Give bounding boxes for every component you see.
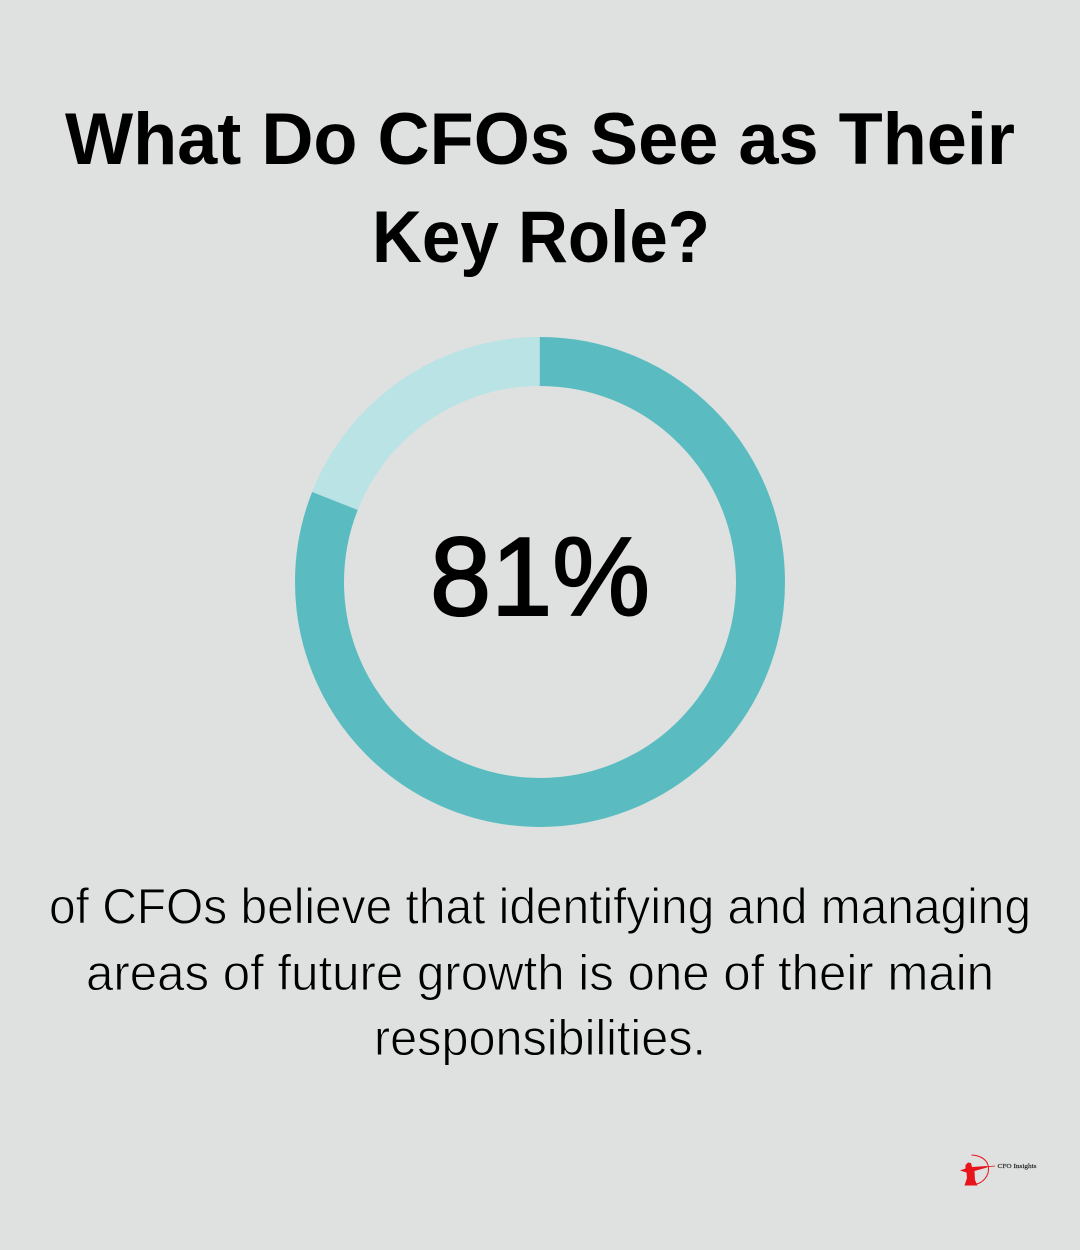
title: Key Role? bbox=[372, 197, 710, 278]
description text bbox=[49, 878, 1031, 1066]
logo: CFO Insights bbox=[960, 1155, 1037, 1186]
description text: of CFOs believe that identifying and managing bbox=[49, 878, 1031, 934]
title bbox=[65, 99, 1015, 278]
donut value: 81% bbox=[430, 515, 650, 639]
title: What Do CFOs See as Their bbox=[65, 99, 1015, 180]
donut chart: 81% bbox=[320, 362, 760, 802]
description text: responsibilities. bbox=[374, 1010, 706, 1066]
icon: red archer bbox=[960, 1155, 995, 1186]
logo text: CFO Insights bbox=[998, 1164, 1037, 1170]
description text: areas of future growth is one of their main bbox=[86, 945, 994, 1001]
